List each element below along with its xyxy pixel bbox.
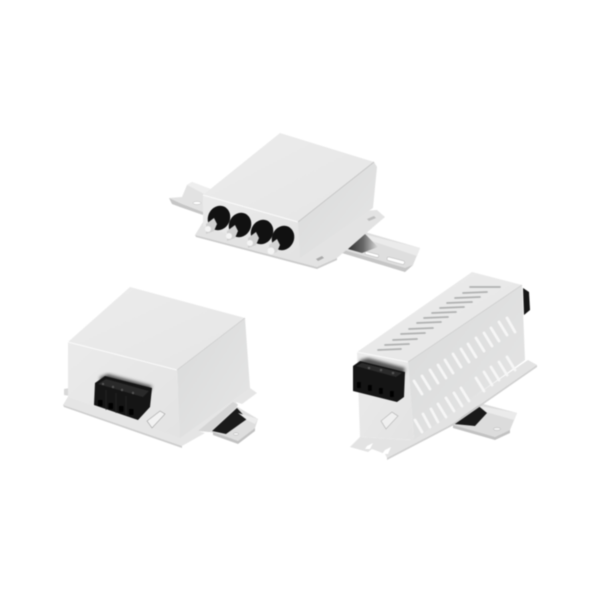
top filter (169, 133, 420, 272)
upper side vent slots: right filter (414, 318, 515, 394)
terminal shadow: right filter (360, 358, 405, 374)
top face: left filter (68, 287, 245, 370)
DIN rail: left filter (210, 406, 258, 444)
top vent slots: right filter (378, 287, 500, 350)
top face: right filter (357, 272, 522, 362)
top face: top filter (203, 133, 374, 222)
earth screw: right filter (381, 412, 398, 429)
mounting flange: left filter (63, 388, 257, 448)
right face: left filter (177, 318, 250, 438)
DIN rail: right filter (450, 402, 517, 440)
mounting flange: right filter (350, 360, 537, 460)
front face: right filter (357, 352, 414, 440)
bottom-right filter (350, 272, 537, 460)
black terminal block: right filter (353, 361, 405, 402)
right face: right filter (408, 285, 525, 440)
mounting flange: top filter (195, 210, 385, 267)
four black cable glands with terminals (204, 202, 298, 255)
right face: top filter (298, 162, 377, 258)
terminal shadow: left filter (100, 374, 152, 392)
front face: left filter (68, 342, 180, 438)
DIN rail: top filter (169, 182, 420, 272)
earth screw: left filter (147, 411, 165, 428)
black terminal block: left filter (94, 376, 152, 420)
bottom-left filter (63, 287, 258, 448)
lower side vent slots: right filter (415, 357, 515, 432)
front face: top filter (203, 195, 300, 258)
black rear tab: right filter (523, 288, 530, 315)
